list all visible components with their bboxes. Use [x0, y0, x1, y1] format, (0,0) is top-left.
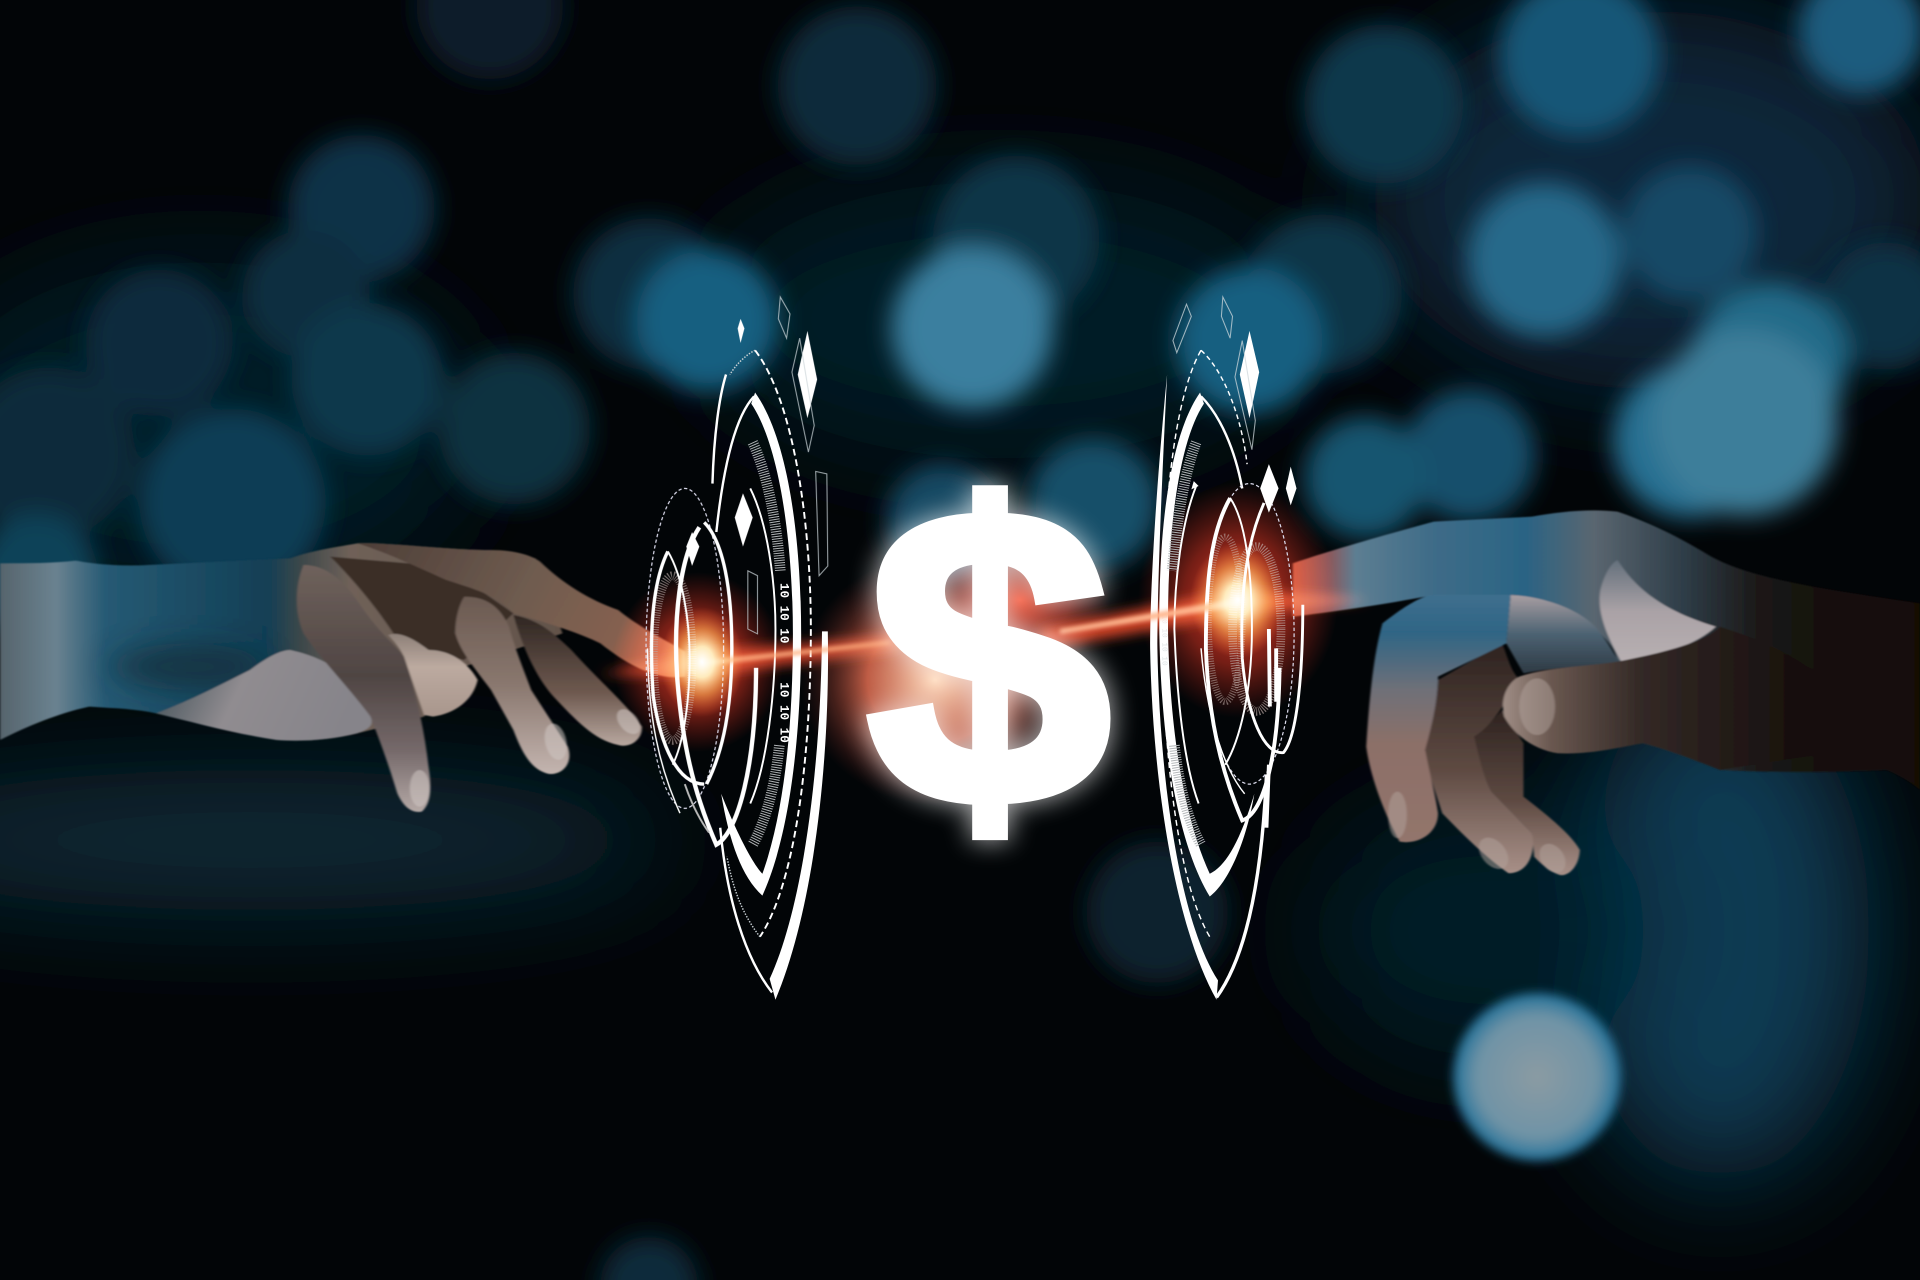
- right large ring: [1150, 350, 1266, 1000]
- bokeh: bright lower right light: [1453, 993, 1621, 1161]
- left ring digits: 10 10 10: [776, 583, 790, 643]
- glow: hot spots at fingertips: [660, 542, 1286, 717]
- left hand: palm: [156, 650, 372, 741]
- left hand: fingernails: [410, 706, 645, 807]
- right ring digits: 10 10 10 10: [1159, 614, 1167, 666]
- left hand: arm and back of hand: [0, 543, 562, 741]
- light beam: bright core: [700, 598, 1240, 666]
- right hand: forearm and index finger: [1293, 510, 1920, 790]
- left hand: index finger: [357, 543, 685, 677]
- left hand: shaded back of hand: [330, 557, 513, 660]
- light beam: red outer streak: [600, 590, 1370, 676]
- left hand: [0, 543, 685, 812]
- left large ring: [712, 350, 828, 1000]
- left hand: third finger: [513, 615, 642, 746]
- right hand: second finger: [1425, 643, 1533, 873]
- left hand: thumb: [388, 634, 478, 717]
- right hand: fingernails: [1388, 678, 1570, 876]
- right hand: heel of hand: [1506, 595, 1620, 673]
- left hand: second finger: [455, 597, 569, 774]
- right small ring cluster: [1201, 484, 1303, 828]
- left ring diamonds: [686, 297, 828, 634]
- left small ring cluster: [646, 488, 756, 845]
- dollar sign: $: [868, 423, 1110, 892]
- right hand: third finger: [1474, 710, 1580, 875]
- right hand: [1293, 510, 1920, 876]
- glow: red halos behind rings: [613, 482, 1338, 805]
- holographic rings: [646, 297, 1303, 1000]
- left hand: little finger: [297, 565, 430, 812]
- right hand: first finger: [1366, 595, 1511, 842]
- left ring digits: 10 10 10: [776, 682, 790, 743]
- left ring digits: [776, 583, 790, 743]
- right hand: palm creases: [1600, 560, 1716, 663]
- right ring diamonds: [1173, 297, 1297, 513]
- dollar sign glow: $: [868, 423, 1110, 892]
- left hand: shadow on wrist: [112, 643, 263, 690]
- right hand: thumb: [1503, 627, 1870, 770]
